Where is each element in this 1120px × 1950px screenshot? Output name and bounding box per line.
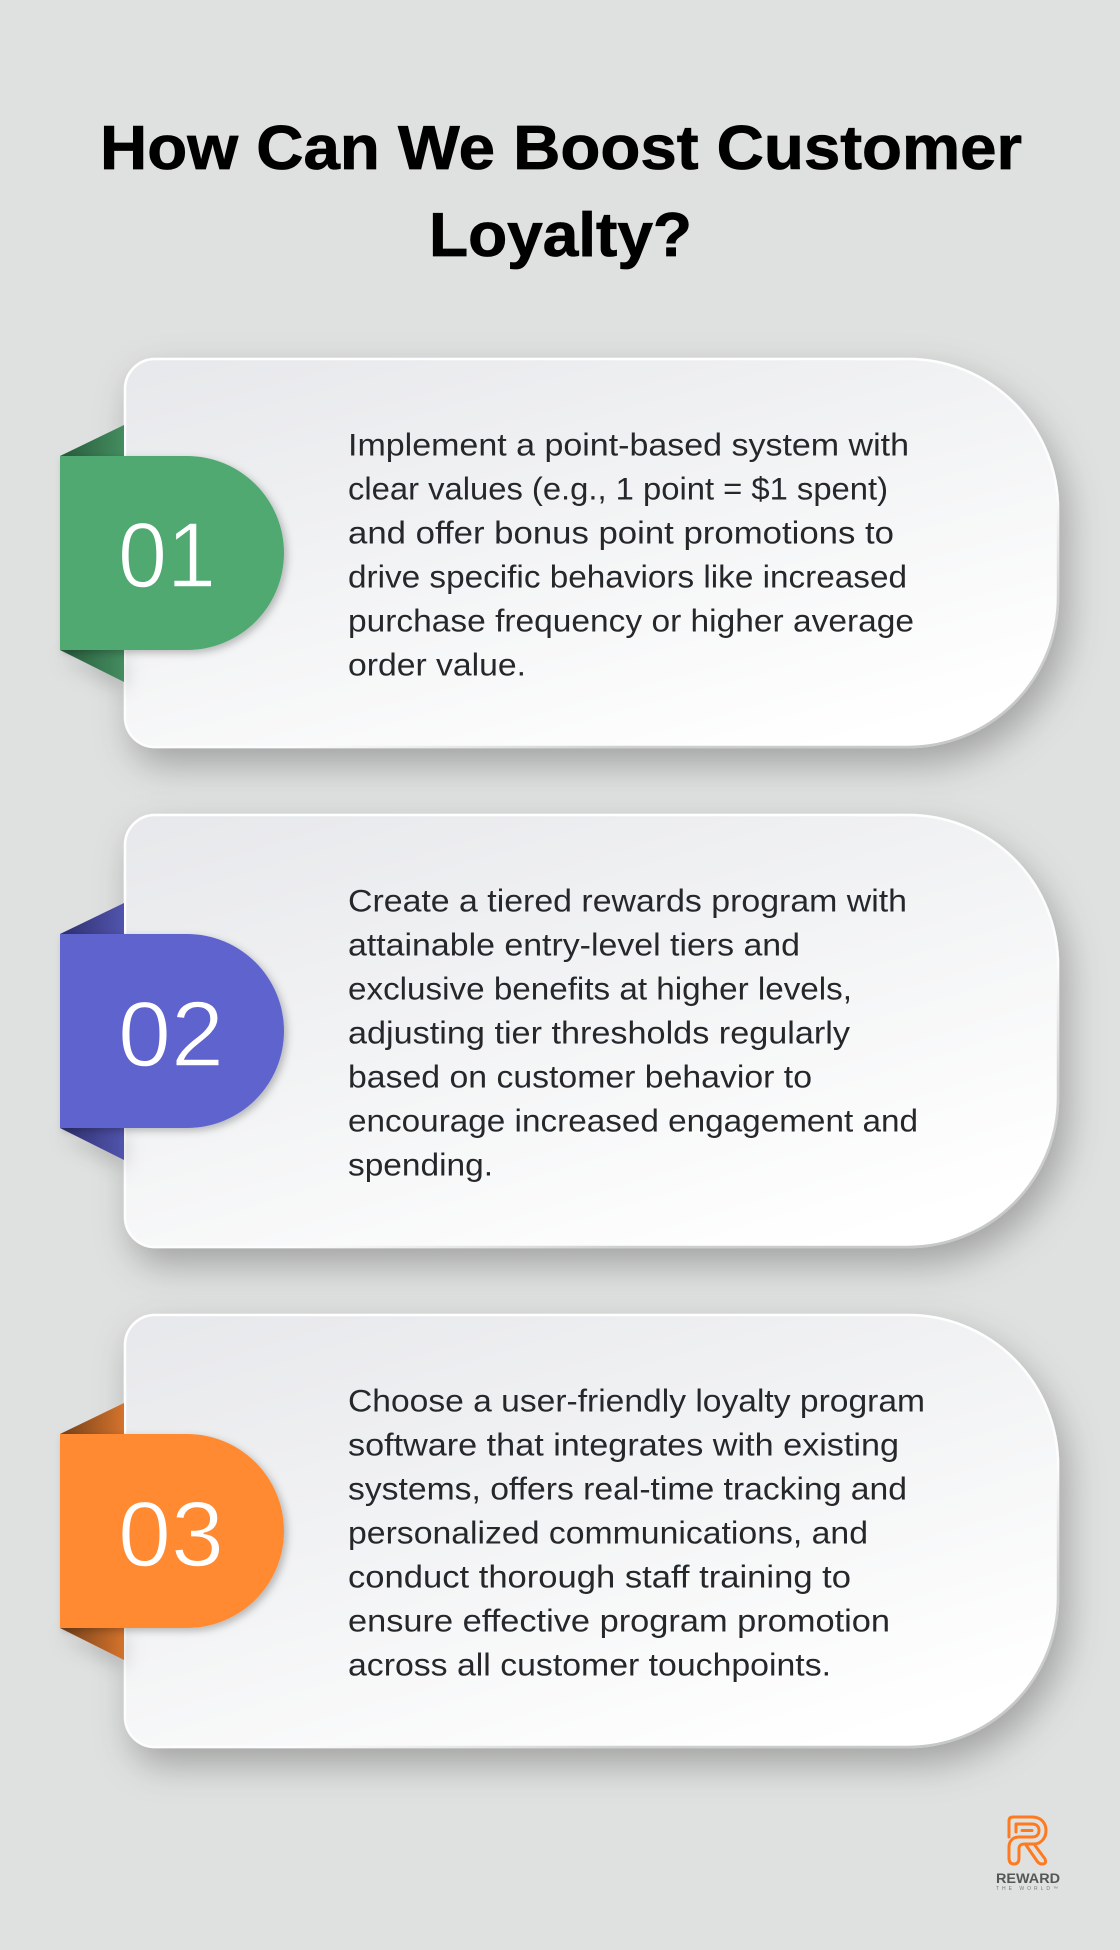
step 2 text: attainable entry-level tiers and (348, 926, 800, 962)
step 2 text (348, 882, 918, 1182)
number badge 3 (60, 1434, 284, 1628)
step 1 text: clear values (e.g., 1 point = $1 spent) (348, 470, 888, 506)
number badge 2 (60, 934, 284, 1128)
step 3 text: conduct thorough staff training to (348, 1558, 851, 1594)
step 3 text: personalized communications, and (348, 1514, 868, 1550)
title: Loyalty? (429, 201, 692, 270)
step 3 text: software that integrates with existing (348, 1426, 899, 1462)
step 1 text (348, 426, 914, 682)
step 2 text: exclusive benefits at higher levels, (348, 970, 852, 1006)
card 3 background (125, 1315, 1058, 1747)
logo tagline: THE WORLD™ (996, 1886, 1058, 1892)
ribbon fold bottom 2 (60, 1128, 124, 1160)
number 01: 01 (118, 503, 216, 607)
panel: step 1 (60, 359, 1058, 747)
panel: step 3 (60, 1315, 1058, 1747)
step 3 text: Choose a user-friendly loyalty program (348, 1382, 925, 1418)
step 2 text: encourage increased engagement and (348, 1102, 918, 1138)
step 2 text: based on customer behavior to (348, 1058, 812, 1094)
ribbon fold bottom 3 (60, 1628, 124, 1660)
title (100, 114, 1022, 270)
panel: step 2 (60, 815, 1058, 1247)
number badge 1 (60, 456, 284, 650)
step 2 text: spending. (348, 1146, 493, 1182)
title: How Can We Boost Customer (100, 114, 1022, 183)
step 3 text: across all customer touchpoints. (348, 1646, 831, 1682)
step 2 text: Create a tiered rewards program with (348, 882, 907, 918)
logo wordmark: REWARD (996, 1871, 1060, 1886)
step 1 text: order value. (348, 646, 526, 682)
step 3 text: systems, offers real-time tracking and (348, 1470, 907, 1506)
icon: R mark (1009, 1817, 1046, 1864)
ribbon fold top 1 (60, 425, 124, 456)
step 3 text (348, 1382, 925, 1682)
step 1 text: and offer bonus point promotions to (348, 514, 894, 550)
step 1 text: Implement a point-based system with (348, 426, 909, 462)
number 03: 03 (118, 1482, 224, 1586)
ribbon fold bottom 1 (60, 650, 124, 682)
number 02: 02 (118, 982, 224, 1086)
step 1 text: purchase frequency or higher average (348, 602, 914, 638)
ribbon fold top 2 (60, 903, 124, 934)
ribbon fold top 3 (60, 1403, 124, 1434)
step 2 text: adjusting tier thresholds regularly (348, 1014, 850, 1050)
step 3 text: ensure effective program promotion (348, 1602, 890, 1638)
card 2 background (125, 815, 1058, 1247)
step 1 text: drive specific behaviors like increased (348, 558, 907, 594)
logo: Reward the World (996, 1817, 1060, 1892)
card 1 background (125, 359, 1058, 747)
